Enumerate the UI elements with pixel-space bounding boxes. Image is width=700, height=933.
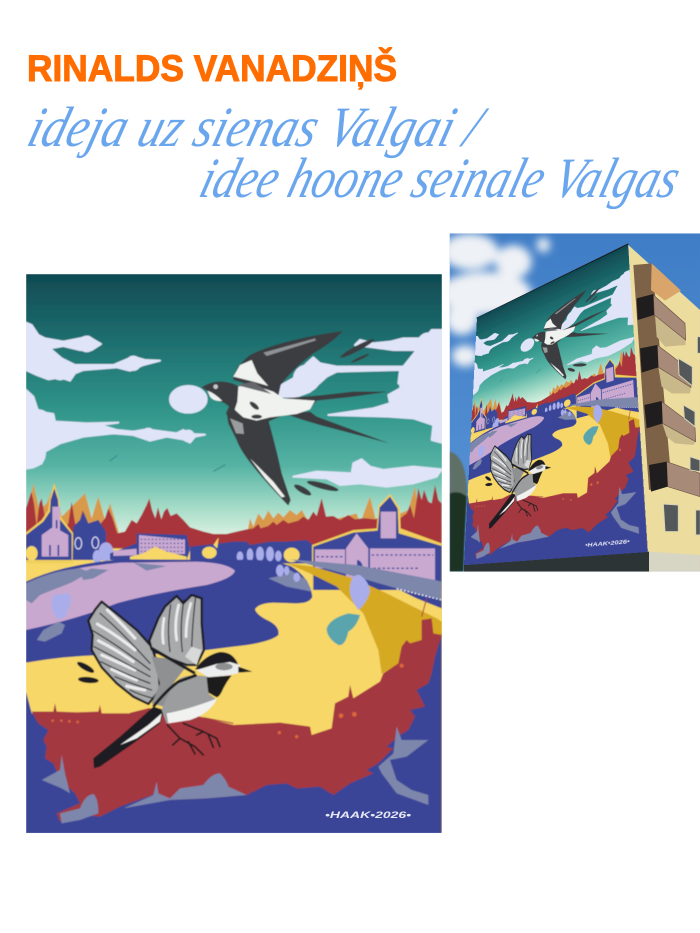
grey reflections: [26, 563, 312, 642]
black bib: [207, 675, 232, 697]
red power lines and poles: [130, 598, 427, 723]
tail white stripe: [120, 713, 162, 745]
body marks: [248, 400, 262, 419]
roof overhang: [651, 263, 681, 301]
blue foreground border: [26, 633, 442, 833]
mural signature: •HAAK•2026•: [585, 538, 613, 549]
teal tree reflection: [327, 613, 360, 645]
eye: [213, 384, 218, 389]
wing band: [237, 382, 272, 394]
legs: [167, 723, 220, 755]
right wing feathers: [163, 597, 196, 652]
belly: [167, 698, 217, 723]
lilac treelets: [237, 547, 282, 562]
wing bar: [152, 648, 197, 707]
body: [162, 675, 217, 723]
swallow bird: [202, 331, 389, 506]
wall shadows under balconies: [655, 315, 696, 445]
orange back treeline: [26, 483, 442, 553]
grey inner wing: [152, 657, 187, 707]
head cap: [195, 652, 238, 669]
tail: [93, 707, 164, 768]
plinth: [648, 552, 700, 572]
body: [233, 385, 315, 421]
distant birds: [109, 455, 225, 471]
blue sky: [450, 233, 700, 572]
road: [290, 559, 442, 600]
lavender tree blob right: [350, 575, 370, 610]
head: [202, 382, 238, 412]
dark base strip: [464, 552, 649, 572]
blue river: [26, 559, 312, 663]
clouds: [18, 323, 442, 487]
upper part of the artwork: [18, 323, 443, 832]
yellow bushes: [26, 537, 300, 563]
upper wing white patch: [233, 360, 268, 386]
blue road edge: [395, 588, 442, 608]
upper tail streamer: [283, 392, 388, 407]
left wing feathers: [92, 610, 153, 698]
white clouds: [438, 233, 550, 367]
sky gradient: [26, 274, 442, 833]
white throat: [207, 391, 222, 401]
windows: [663, 337, 700, 535]
upper wing: [233, 331, 343, 396]
panel: mural design artwork: [18, 274, 443, 833]
script subtitle line 2: idee hoone seinale Valgas: [193, 147, 687, 210]
blue trees beside church: [73, 512, 106, 560]
mural on the wall: [464, 245, 648, 565]
lower part of the artwork: [26, 559, 442, 833]
artist signature: •HAAK•2026•: [325, 810, 411, 820]
balcony column: [633, 263, 672, 490]
small dark marks near wagtail: [76, 660, 99, 684]
red treeline: [26, 485, 442, 560]
red foreground land: [32, 618, 442, 822]
white face: [197, 662, 240, 677]
script subtitle line 1: ideja uz sienas Valgai /: [21, 96, 493, 159]
upper wing grey streak: [263, 338, 316, 356]
low school building: [110, 533, 190, 560]
right monastery building: [312, 494, 442, 590]
tree: [450, 452, 467, 572]
artist name heading: RINALDS VANADZIŅŠ: [27, 47, 397, 90]
yellow apartment wall: [628, 245, 700, 572]
lilac water surface: [26, 562, 235, 630]
white tree outlines: [75, 537, 99, 549]
lilac round trees: [93, 542, 113, 563]
lower wing streaks: [250, 458, 285, 497]
balcony slats: [653, 295, 700, 497]
grey eye patch: [215, 663, 233, 670]
golden shaded field sector: [287, 563, 442, 674]
road dashes: [397, 589, 442, 600]
left church: [25, 483, 73, 563]
lavender tree blob left: [51, 593, 71, 620]
small lavender treelets: [276, 565, 300, 582]
ground: sunlit yellow field: [26, 548, 443, 832]
lower wing: [227, 413, 291, 506]
lower wing grey patch: [230, 418, 244, 434]
mural top edge: [477, 244, 628, 318]
beak: [238, 667, 252, 673]
small orange windows: [51, 664, 404, 738]
right wing base: [149, 595, 204, 665]
left wing base: [88, 602, 160, 704]
grey-blue silhouettes: [42, 727, 428, 823]
lower tail streamer: [283, 412, 389, 443]
underbody shadow: [226, 397, 283, 427]
balcony dark shutters: [637, 294, 668, 492]
feather marks: [293, 337, 376, 497]
wagtail bird: [88, 595, 252, 768]
central town silhouettes: [190, 540, 313, 563]
